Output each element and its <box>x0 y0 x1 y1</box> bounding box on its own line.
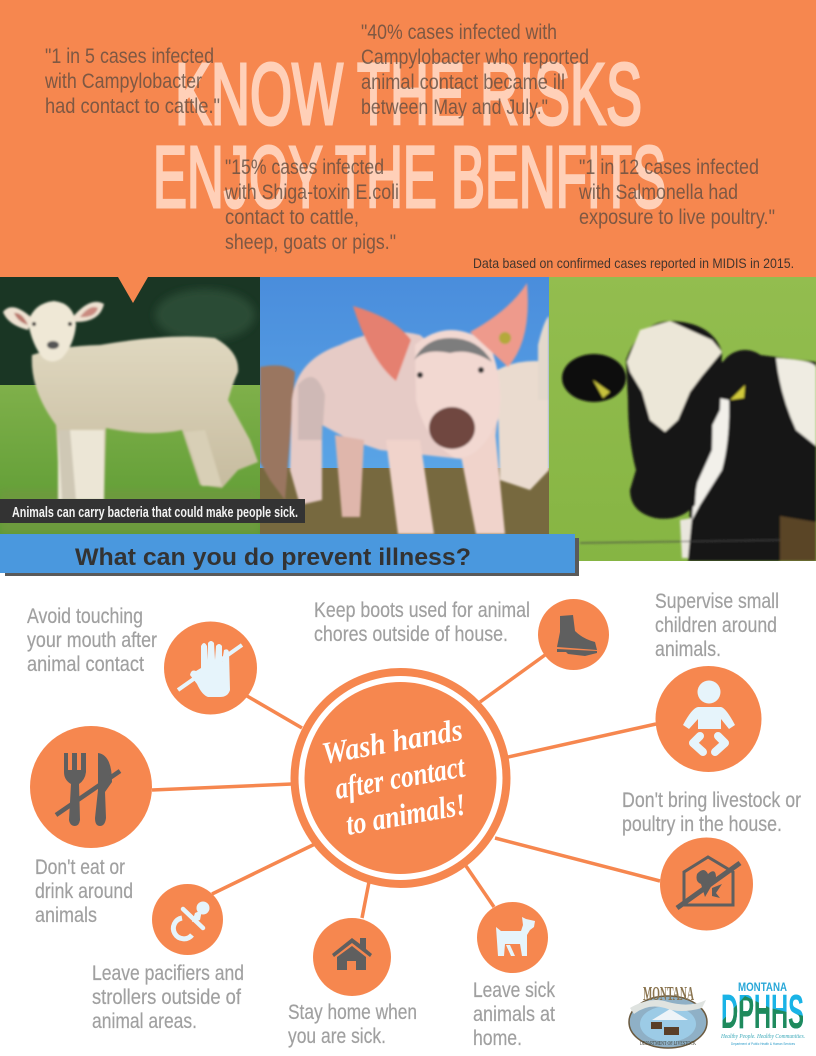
tip: pacifiers and strollers: strollers outside of <box>92 986 241 1009</box>
tip: sick animals: Leave sick <box>473 979 555 1002</box>
logo: Montana Department of Livestock: DEPARTMENT OF LIVESTOCK <box>640 1041 696 1047</box>
tip: supervise children: Supervise small <box>655 590 779 613</box>
tip: no livestock in house: poultry in the house. <box>622 813 782 836</box>
icon: dog <box>477 902 548 973</box>
tip: don't eat or drink: drink around <box>35 880 133 903</box>
statistic: Salmonella: exposure to live poultry." <box>579 206 775 229</box>
statistic: Salmonella: "1 in 12 cases infected <box>579 156 759 179</box>
statistic: cattle contact <box>44 45 220 118</box>
statistic: Shiga-toxin E.coli: sheep, goats or pigs." <box>225 231 396 254</box>
logo: Montana DPHHS: Healthy People. Healthy Communities. <box>720 1034 805 1040</box>
tip: sick animals: home. <box>473 1027 522 1050</box>
logo: Montana Department of Livestock: MONTANA <box>643 983 694 1005</box>
statistic: cattle contact: "1 in 5 cases infected <box>45 45 214 68</box>
tip: stay home: you are sick. <box>288 1025 386 1048</box>
title <box>153 46 666 226</box>
section heading bar <box>0 534 579 576</box>
tip: keep boots outside: Keep boots used for animal <box>314 599 530 622</box>
statistic: Shiga-toxin E.coli: "15% cases infected <box>225 156 384 179</box>
icon: house <box>313 918 391 996</box>
central callout: to animals! <box>343 786 468 842</box>
statistic: Shiga-toxin E.coli <box>224 156 399 254</box>
section heading bar: What can you do prevent illness? <box>75 544 471 571</box>
photo: cow <box>549 277 816 561</box>
header pointer <box>118 277 148 303</box>
statistic: May to July: Campylobacter who reported <box>361 46 589 69</box>
tip: pacifiers and strollers <box>92 962 244 1033</box>
central callout: after contact <box>332 748 468 806</box>
logo: Montana Department of Livestock <box>629 983 707 1048</box>
logo: Montana DPHHS: Department of Public Health & Human Services <box>731 1042 795 1046</box>
statistic: May to July <box>361 21 589 119</box>
caption: Animals can carry bacteria that could make people sick. <box>12 504 298 521</box>
statistic: May to July: "40% cases infected with <box>361 21 557 44</box>
tip: pacifiers and strollers: Leave pacifiers and <box>92 962 244 985</box>
icon: pacifier <box>152 884 223 955</box>
logo: Montana DPHHS: MONTANA <box>738 980 787 994</box>
statistic: cattle contact: with Campylobacter <box>44 70 202 93</box>
icon: baby <box>656 666 762 772</box>
tip: don't eat or drink <box>35 856 133 927</box>
statistic: Salmonella: with Salmonella had <box>578 181 738 204</box>
tip: sick animals: animals at <box>473 1003 555 1026</box>
icon: boot <box>538 599 609 670</box>
tip: pacifiers and strollers: animal areas. <box>92 1010 197 1033</box>
tip: don't eat or drink: animals <box>35 904 97 927</box>
icon: no eating <box>30 726 152 848</box>
tip: supervise children: animals. <box>655 638 721 661</box>
statistic: Salmonella <box>578 156 775 229</box>
central callout: Wash hands <box>319 712 465 771</box>
tip: keep boots outside: chores outside of house. <box>314 623 508 646</box>
connector lines <box>152 655 660 918</box>
tip: supervise children <box>655 590 779 661</box>
tip: supervise children: children around <box>655 614 777 637</box>
tip: avoid touching mouth: animal contact <box>27 653 144 676</box>
tip: don't eat or drink: Don't eat or <box>35 856 125 879</box>
photo: lamb <box>0 277 260 535</box>
photo: pig <box>260 277 549 538</box>
statistic: May to July: animal contact became ill <box>361 71 565 94</box>
icon: no livestock in house <box>660 838 753 930</box>
tip: avoid touching mouth: your mouth after <box>27 629 157 652</box>
icon: no hand <box>164 622 257 714</box>
tip: avoid touching mouth: Avoid touching <box>27 605 143 628</box>
tip: no livestock in house <box>622 789 801 836</box>
caption <box>0 499 305 523</box>
statistic: Shiga-toxin E.coli: with Shiga-toxin E.coli <box>224 181 399 204</box>
tip: stay home: Stay home when <box>288 1001 417 1024</box>
central callout <box>290 668 510 888</box>
statistic: cattle contact: had contact to cattle." <box>45 95 220 118</box>
statistic: May to July: between May and July." <box>361 96 548 119</box>
tip: stay home <box>288 1001 417 1048</box>
tip: avoid touching mouth <box>27 605 157 676</box>
tip: keep boots outside <box>314 599 530 646</box>
header panel <box>0 0 816 277</box>
tip: sick animals <box>473 979 555 1050</box>
statistic: Shiga-toxin E.coli: contact to cattle, <box>225 206 359 229</box>
